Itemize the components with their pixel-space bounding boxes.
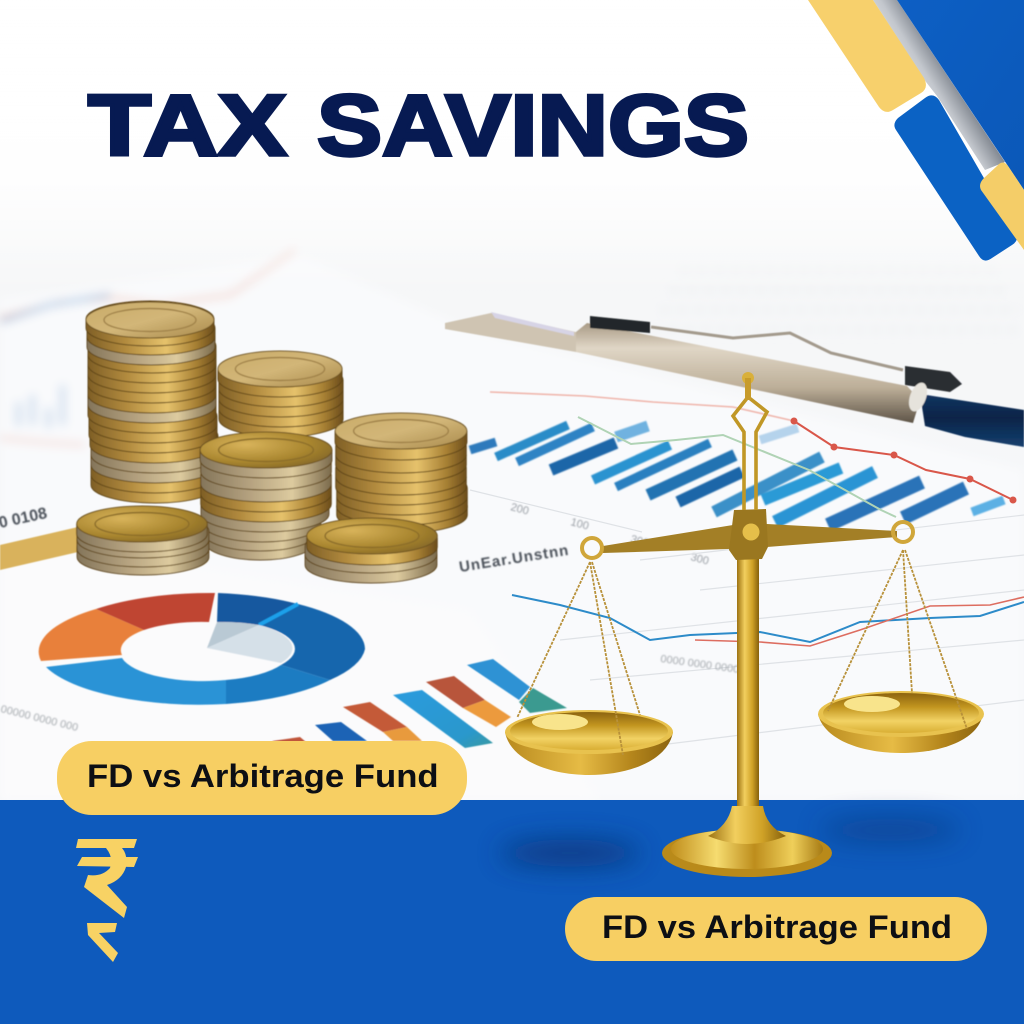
left pan [505, 710, 673, 775]
bar chart tick labels [509, 501, 710, 568]
pill label: right [565, 897, 987, 961]
blue footer band [0, 800, 1024, 1024]
coin stacks [77, 301, 467, 583]
column [737, 555, 759, 807]
balance scale [505, 372, 984, 877]
beam [603, 524, 897, 553]
coin stack: front right [305, 518, 437, 583]
pill label: left: FD vs Arbitrage Fund [87, 759, 439, 795]
second scale shadow on band [820, 818, 960, 842]
bar chart: blue bars [470, 425, 1004, 525]
icon: rupee symbol [76, 839, 138, 962]
coin stack: tall back left [86, 301, 219, 503]
pill label: left [57, 741, 467, 815]
icon: small rupee arrow [87, 923, 118, 962]
donut chart [39, 593, 365, 705]
coin stack: front middle [200, 432, 332, 560]
title: SAVINGS [317, 78, 749, 174]
corner decoration: blue and gold blocks [808, 0, 1024, 261]
sheet caption: 00000 0000 000 [0, 703, 79, 734]
bar chart tick labels: 300 [629, 533, 650, 550]
main report sheet [0, 548, 600, 800]
right pan [818, 691, 984, 753]
coin stack: front left [77, 506, 209, 575]
right pan chains [828, 550, 967, 729]
bar chart tick labels: 200 [509, 501, 530, 518]
lower line chart [470, 490, 1024, 745]
background paper [0, 0, 1024, 800]
coin stack: right [335, 413, 467, 533]
sheet caption [0, 505, 740, 734]
title [88, 78, 749, 174]
bar chart tick labels: 300 [689, 551, 710, 568]
pen and clipboard clip [445, 312, 1024, 447]
blurred report sheets [0, 250, 1024, 800]
left pan chains [517, 562, 640, 755]
sheet caption: 0000 0000 0000 [660, 653, 740, 676]
coin stack: back middle [218, 351, 343, 437]
pill label: right: FD vs Arbitrage Fund [602, 910, 952, 946]
line chart: red and green trend [490, 392, 1016, 517]
scale shadow on band [500, 839, 640, 867]
lower left perspective bars [272, 659, 567, 748]
soft white fade behind title [0, 0, 1024, 300]
base [662, 806, 832, 877]
pivot block [729, 509, 768, 560]
sheet caption: UnEar.Unstnn [458, 542, 570, 576]
bar chart tick labels: 100 [569, 516, 590, 533]
top hanger [733, 397, 767, 510]
title: TAX [88, 78, 287, 174]
